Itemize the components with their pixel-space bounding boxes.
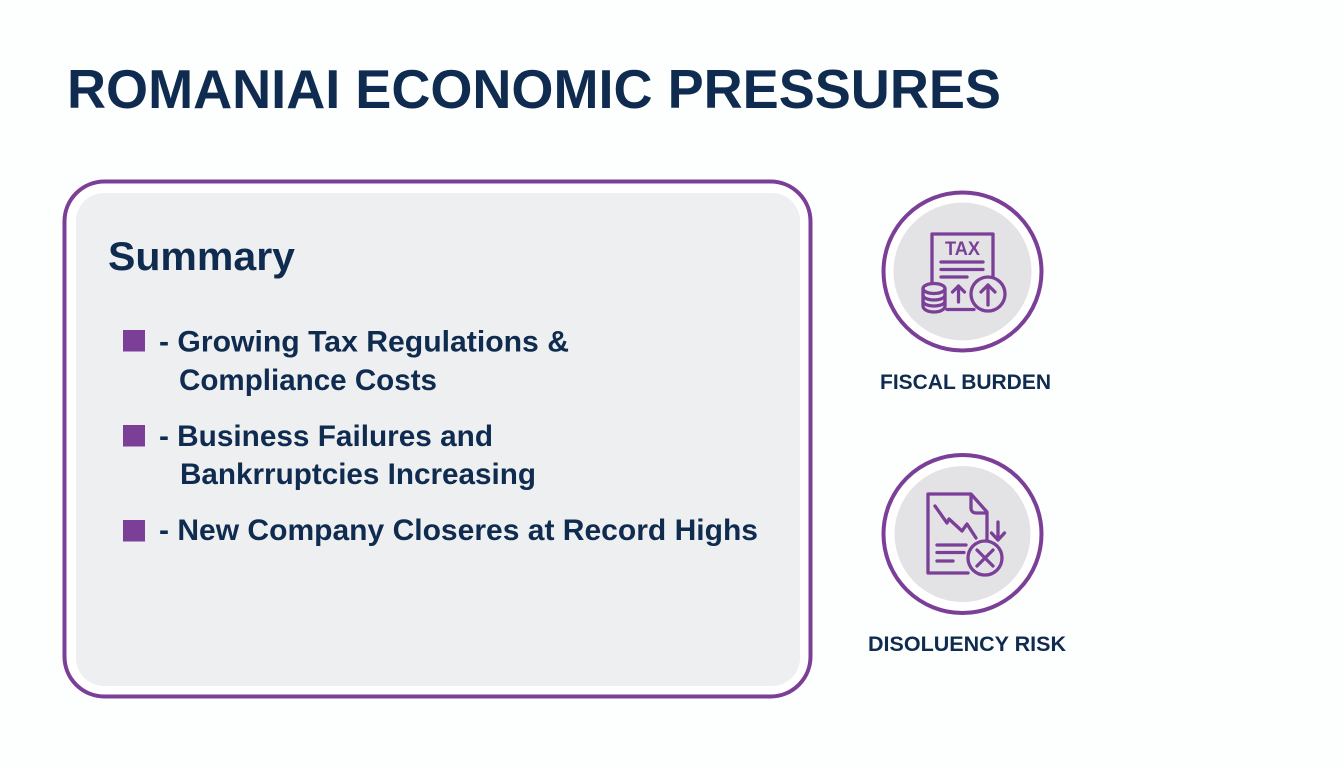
panel outer border (64, 182, 810, 696)
icon: tax document with coins and up arrows: TAX (945, 239, 980, 260)
icon: falling chart document with cross (884, 455, 1042, 613)
bullet 1 (123, 326, 569, 397)
bullet 2: Bankrruptcies Increasing (180, 458, 536, 491)
bullet 2 (123, 420, 536, 491)
bullet 3: - New Company Closeres at Record Highs (159, 514, 758, 547)
bullet 1: - Growing Tax Regulations & (159, 326, 569, 358)
title: ROMANIAI ECONOMIC PRESSURES (67, 58, 1001, 120)
panel: summary (64, 182, 810, 696)
label: fiscal burden: FISCAL BURDEN (880, 371, 1051, 394)
icon: tax document with coins and up arrows (884, 192, 1042, 350)
bullet 2: - Business Failures and (159, 420, 493, 453)
panel heading: Summary (108, 235, 296, 279)
label: disoluency risk: DISOLUENCY RISK (868, 633, 1066, 656)
bullet 1: Compliance Costs (179, 364, 437, 397)
panel inner background (76, 193, 800, 686)
